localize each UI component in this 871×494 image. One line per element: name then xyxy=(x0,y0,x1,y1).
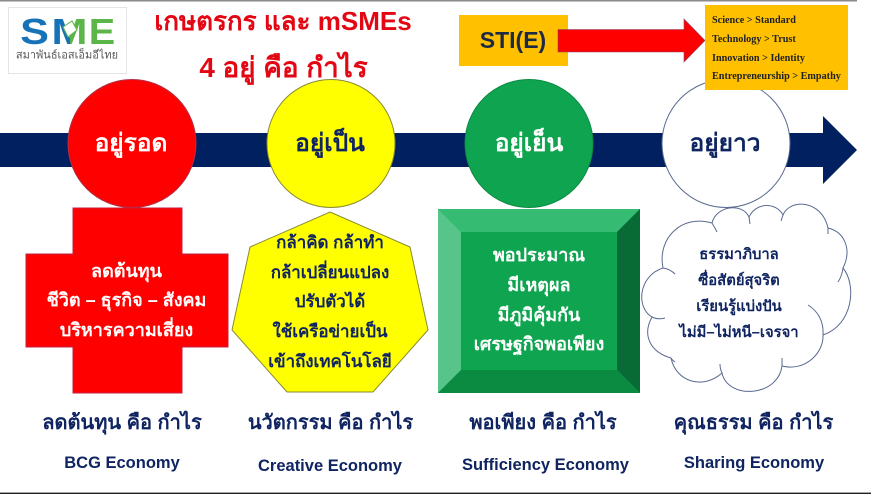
STI(E) box: STI(E) xyxy=(480,27,546,53)
circle: อยู่เป็น: อยู่เป็น xyxy=(295,127,365,158)
circle: อยู่ยาว: อยู่ยาว xyxy=(690,130,760,158)
circle: อยู่เย็น xyxy=(465,80,593,208)
panel: yellow heptagon xyxy=(232,212,428,392)
panel: red cross: ลดต้นทุน xyxy=(91,261,163,283)
STI(E) definitions box: Technology > Trust xyxy=(712,34,796,45)
panel: white cloud: ซื่อสัตย์สุจริต xyxy=(698,269,780,289)
label: Sharing Economy: Sharing Economy xyxy=(684,454,825,472)
label: BCG Economy: BCG Economy xyxy=(64,454,181,472)
panel: yellow heptagon: กล้าคิด กล้าทำ xyxy=(276,233,384,252)
panel: yellow heptagon: กล้าเปลี่ยนแปลง xyxy=(271,260,389,282)
circle: อยู่รอด: อยู่รอด xyxy=(95,130,167,158)
panel: yellow heptagon: ปรับตัวได้ xyxy=(295,291,365,311)
label: คุณธรรม คือ กำไร: คุณธรรม คือ กำไร xyxy=(674,410,833,435)
circle: อยู่เย็น: อยู่เย็น xyxy=(495,127,564,158)
STI(E) definitions box xyxy=(705,5,848,90)
logo: SME: สมาพันธ์เอสเอ็มอีไทย xyxy=(16,48,118,62)
logo: SME xyxy=(8,8,126,74)
panel: red cross xyxy=(26,208,228,393)
panel: green bevel: พอประมาณ xyxy=(493,245,585,265)
panel: green bevel xyxy=(438,209,640,393)
circle: อยู่เป็น xyxy=(267,80,395,208)
logo: SME: E xyxy=(89,13,115,53)
label: นวัตกรรม คือ กำไร: นวัตกรรม คือ กำไร xyxy=(248,410,413,434)
title xyxy=(154,6,412,85)
STI(E) definitions box: Innovation > Identity xyxy=(712,53,805,64)
panel: yellow heptagon: เข้าถึงเทคโนโลยี xyxy=(268,351,392,371)
panel: yellow heptagon: ใช้เครือข่ายเป็น xyxy=(273,320,388,341)
circle: อยู่รอด xyxy=(68,80,196,208)
logo: SME: S xyxy=(20,12,49,52)
circle: อยู่ยาว xyxy=(662,80,790,208)
STI(E) definitions box: Science > Standard xyxy=(712,15,796,26)
label: พอเพียง คือ กำไร: พอเพียง คือ กำไร xyxy=(469,410,617,434)
panel: green bevel: เศรษฐกิจพอเพียง xyxy=(474,334,604,356)
panel: green bevel: มีเหตุผล xyxy=(507,275,571,297)
panel: white cloud: เรียนรู้แบ่งปัน xyxy=(696,298,783,316)
title: เกษตรกร และ mSMEs xyxy=(154,6,412,36)
panel: red cross: ชีวิต – ธุรกิจ – สังคม xyxy=(47,290,206,312)
panel: white cloud xyxy=(642,204,851,391)
label: Sufficiency Economy: Sufficiency Economy xyxy=(462,456,630,474)
label: Creative Economy: Creative Economy xyxy=(258,457,403,475)
arrow: STI(E) to list xyxy=(558,19,705,62)
label: ลดต้นทุน คือ กำไร: ลดต้นทุน คือ กำไร xyxy=(42,410,202,435)
title: 4 อยู่ คือ กำไร xyxy=(199,51,368,85)
arrow: timeline xyxy=(0,116,857,184)
logo: SME: M xyxy=(52,12,87,52)
STI(E) definitions box: Entrepreneurship > Empathy xyxy=(712,71,841,82)
STI(E) box xyxy=(459,15,568,66)
panel: green bevel: มีภูมิคุ้มกัน xyxy=(498,305,581,327)
panel: red cross: บริหารความเสี่ยง xyxy=(60,317,193,340)
panel: white cloud: ธรรมาภิบาล xyxy=(699,246,779,263)
panel: white cloud: ไม่มี–ไม่หนี–เจรจา xyxy=(677,323,799,341)
